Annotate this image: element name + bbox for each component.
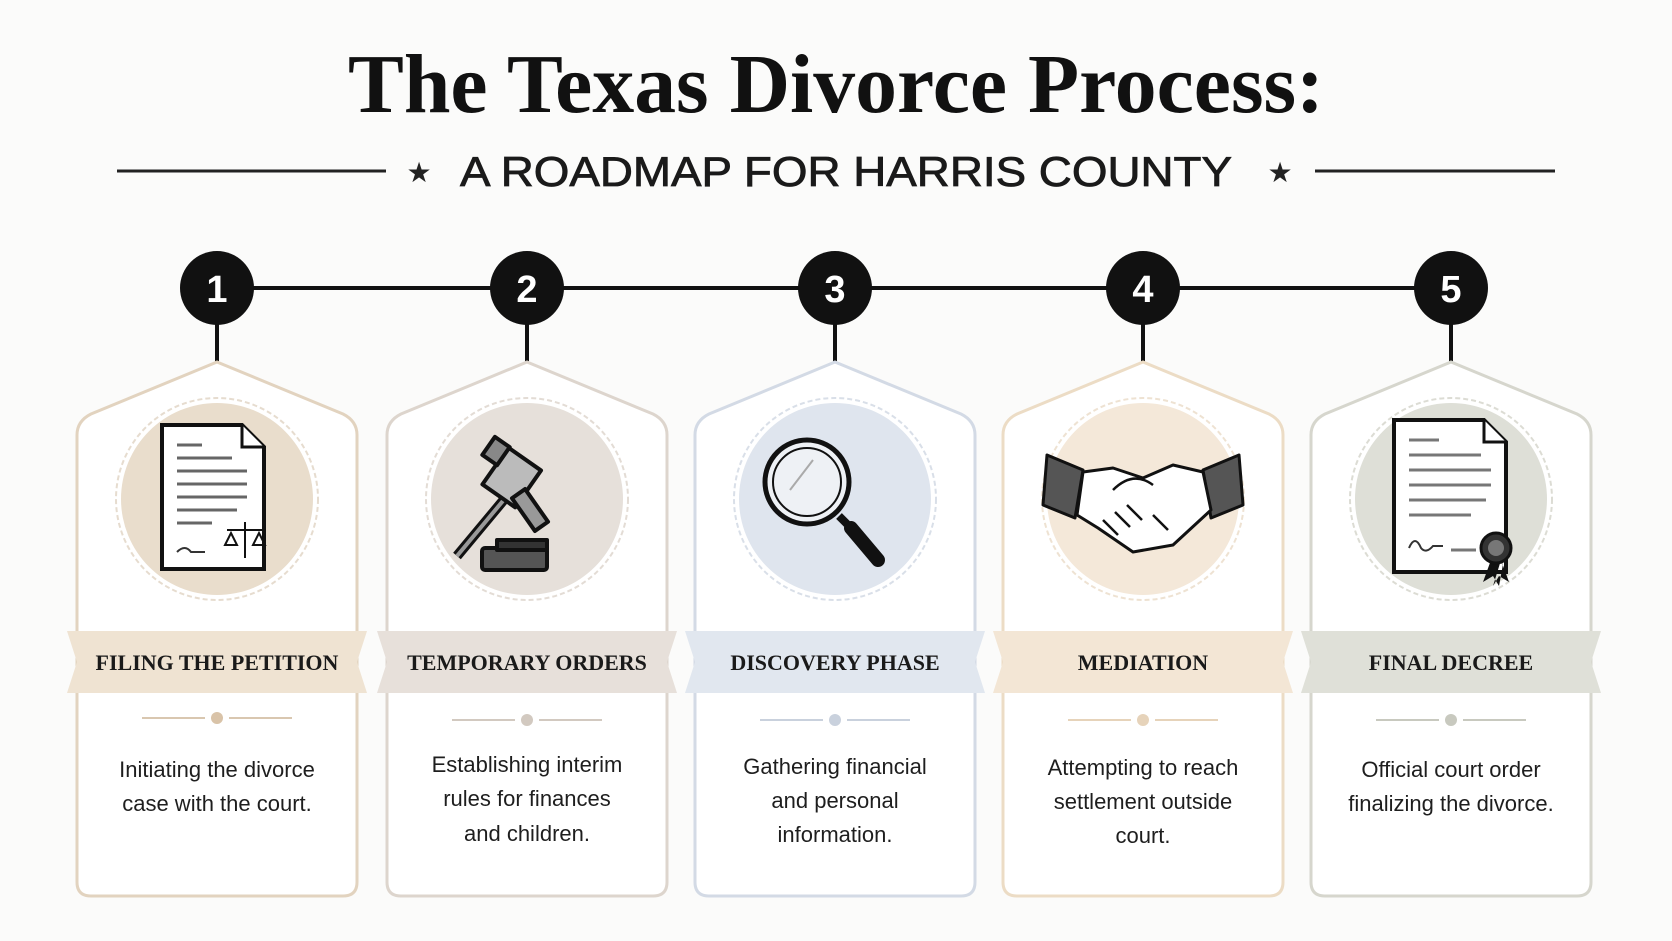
step 2: TEMPORARY ORDERS bbox=[407, 650, 647, 675]
icon: petition document bbox=[162, 425, 265, 569]
icon: handshake bbox=[1043, 455, 1243, 552]
step 2: and children. bbox=[464, 821, 590, 846]
step 5: Official court order bbox=[1361, 757, 1541, 782]
timeline connector bbox=[219, 286, 1451, 290]
step 3 bbox=[685, 251, 985, 896]
subtitle: ★ bbox=[1267, 156, 1293, 189]
step 3: Gathering financial bbox=[743, 754, 927, 779]
icon: gavel bbox=[457, 437, 548, 570]
step 4 bbox=[993, 251, 1293, 896]
step 5: finalizing the divorce. bbox=[1348, 791, 1554, 816]
icon: magnifying glass bbox=[765, 440, 878, 560]
icon: final decree certificate bbox=[1394, 420, 1511, 586]
step 2: 2 bbox=[516, 269, 538, 311]
step 3: 3 bbox=[824, 269, 846, 311]
step 2: rules for finances bbox=[443, 786, 611, 811]
subtitle bbox=[117, 148, 1555, 195]
step 5: FINAL DECREE bbox=[1369, 650, 1533, 675]
step 1: 1 bbox=[206, 269, 228, 311]
step 3: and personal bbox=[771, 788, 899, 813]
step 4: Attempting to reach bbox=[1048, 755, 1238, 780]
step 5 bbox=[1301, 251, 1601, 896]
step 4: settlement outside bbox=[1054, 789, 1232, 814]
subtitle: ★ bbox=[406, 156, 432, 189]
step 4: 4 bbox=[1132, 269, 1154, 311]
step 1: case with the court. bbox=[122, 791, 312, 816]
step 3: information. bbox=[778, 822, 892, 847]
step 1 bbox=[67, 251, 367, 896]
step 5: 5 bbox=[1440, 269, 1462, 311]
step 2 bbox=[377, 251, 677, 896]
step 3: DISCOVERY PHASE bbox=[730, 650, 940, 675]
title: The Texas Divorce Process: bbox=[348, 38, 1324, 131]
step 2: Establishing interim bbox=[432, 752, 622, 777]
step 4: MEDIATION bbox=[1078, 650, 1208, 675]
step 1: Initiating the divorce bbox=[119, 757, 315, 782]
subtitle: A ROADMAP FOR HARRIS COUNTY bbox=[460, 148, 1232, 195]
step 1: FILING THE PETITION bbox=[96, 650, 339, 675]
step 4: court. bbox=[1115, 823, 1171, 848]
